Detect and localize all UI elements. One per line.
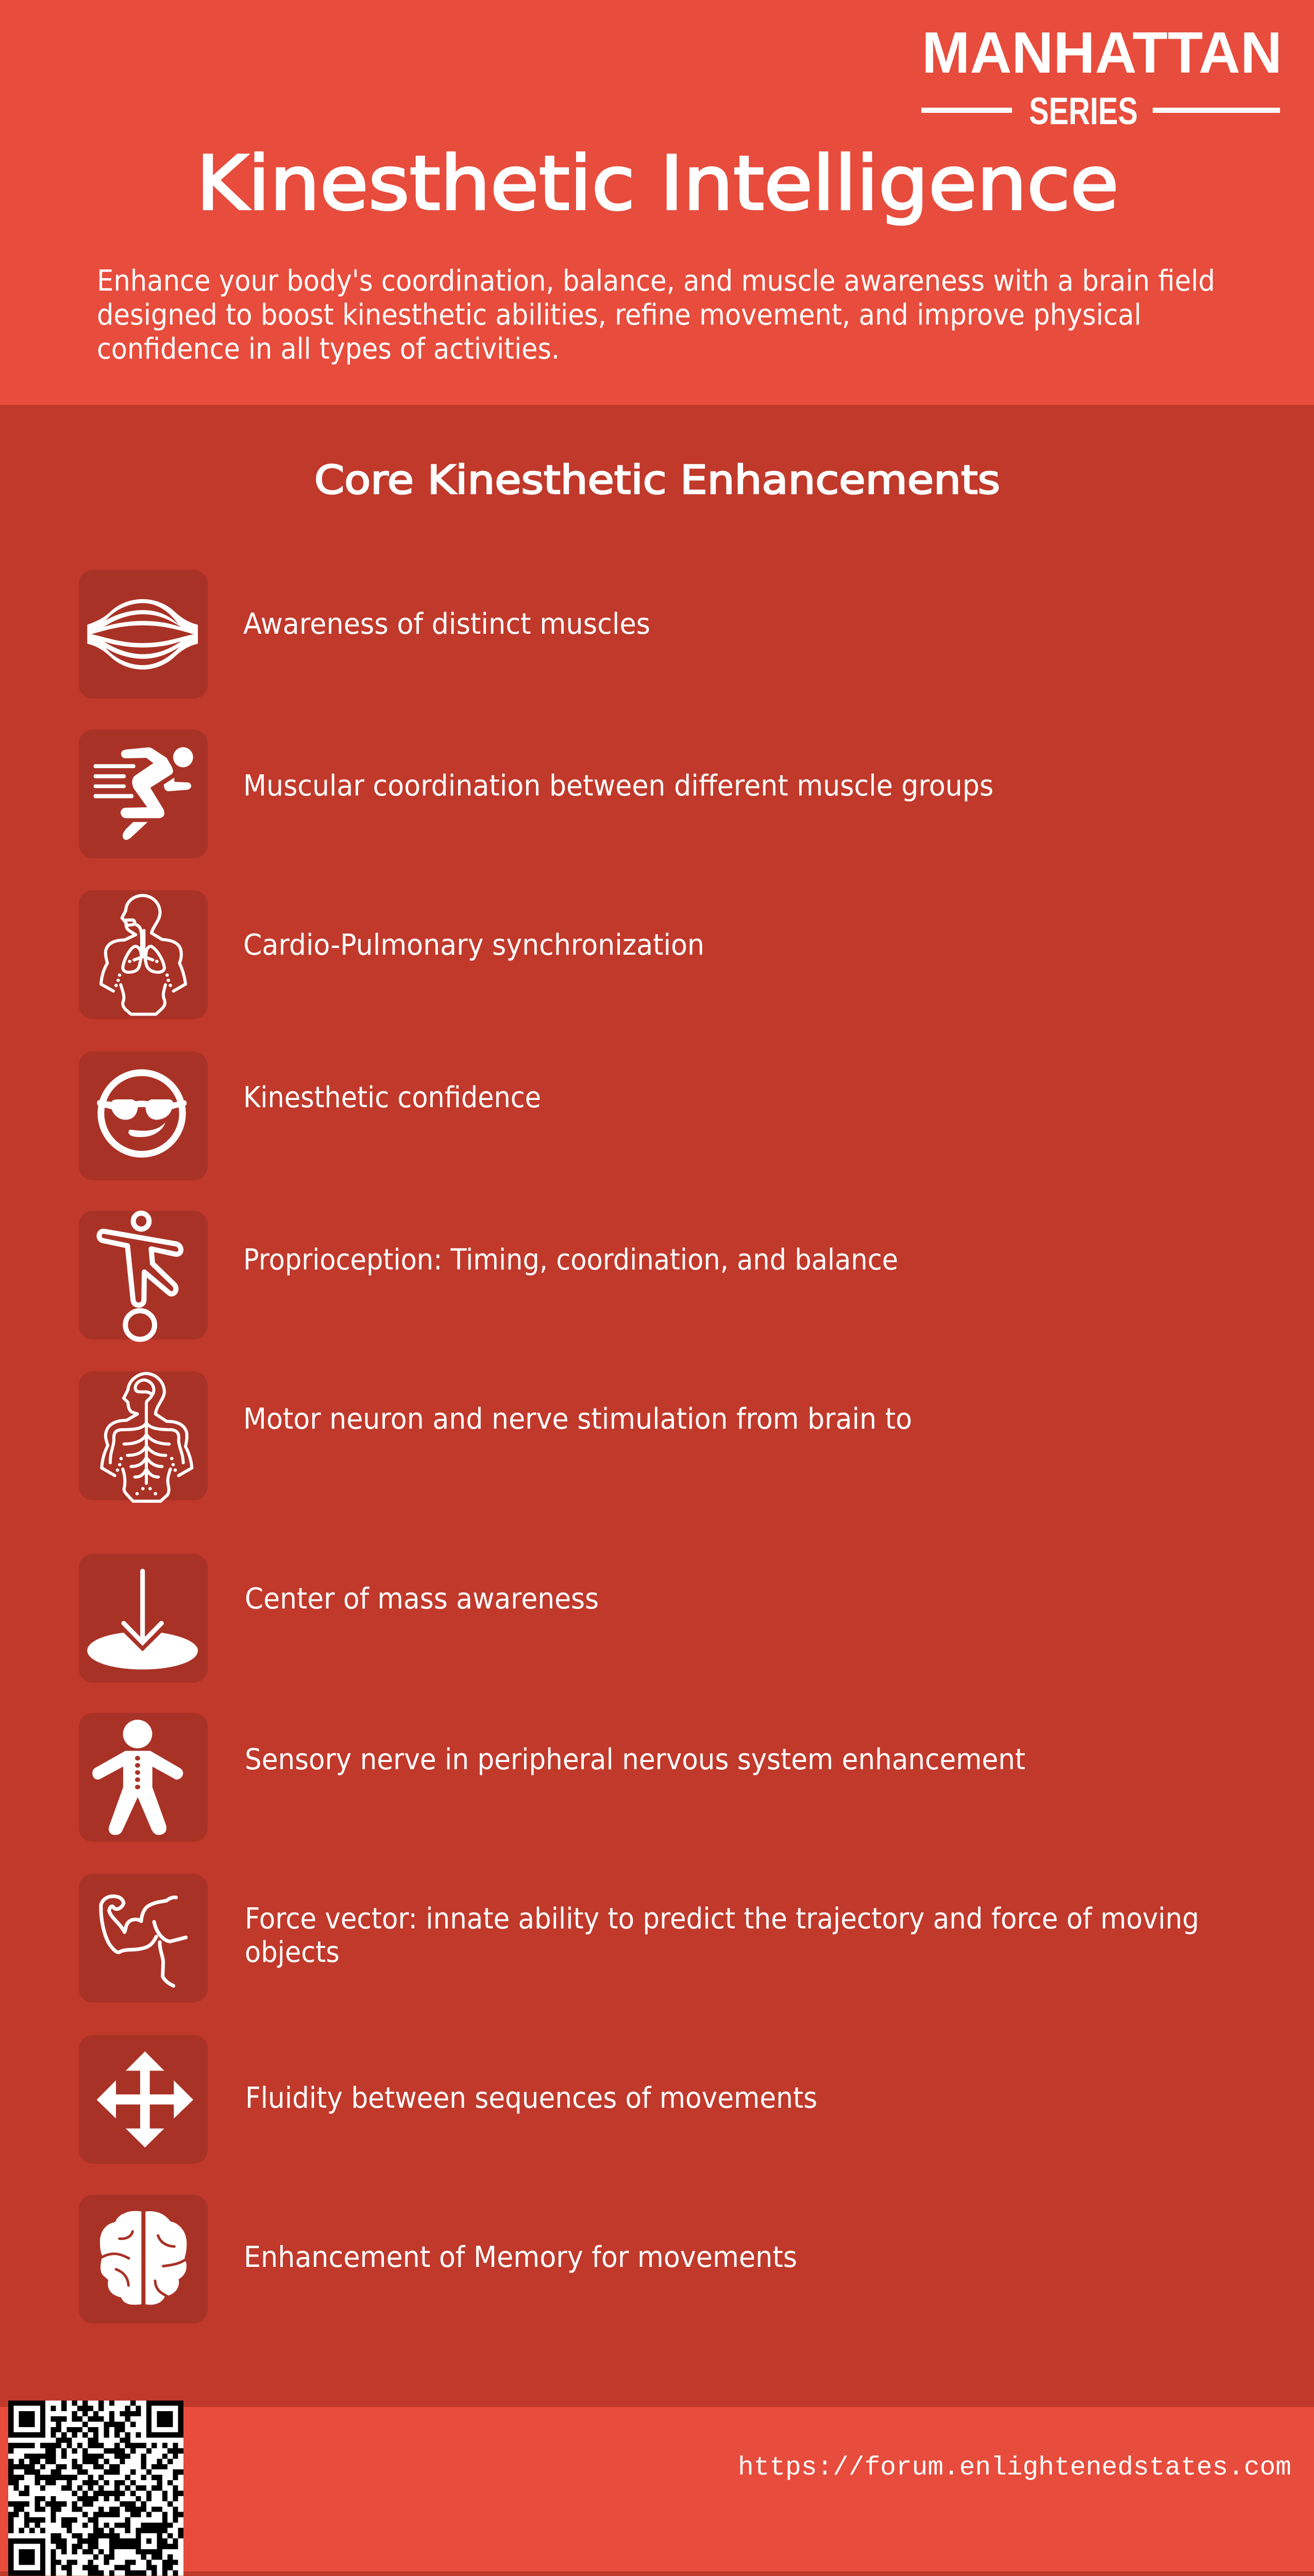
label: Proprioception: Timing, coordination, and balance (243, 1243, 898, 1277)
brand: Manhattan series: SERIES (1029, 90, 1138, 132)
label: Motor neuron and nerve stimulation from brain to (243, 1402, 912, 1436)
label: Center of mass awareness (245, 1582, 599, 1616)
label: Fluidity between sequences of movements (245, 2081, 817, 2115)
brand: Manhattan series: MANHATTAN (922, 20, 1282, 85)
item: fluidity (79, 2035, 817, 2164)
icon: nervous system torso (102, 1374, 192, 1501)
icon: sunglasses smiley (97, 1070, 187, 1158)
icon: runner (94, 747, 193, 840)
item: confidence (79, 1052, 541, 1180)
intro paragraph: designed to boost kinesthetic abilities, refine movement, and improve physical (97, 298, 1141, 332)
item: memory (79, 2195, 797, 2324)
item: coordination (79, 730, 993, 858)
title: Kinesthetic Intelligence (196, 140, 1119, 227)
intro paragraph: confidence in all types of activities. (97, 332, 560, 366)
icon: four-way arrows (97, 2052, 193, 2147)
QR code (8, 2400, 183, 2575)
item: center of mass (79, 1554, 599, 1683)
section heading: Core Kinesthetic Enhancements (314, 457, 1000, 503)
icon: flexing arm (101, 1896, 186, 1986)
label: Kinesthetic confidence (243, 1081, 541, 1114)
label: objects (245, 1936, 340, 1969)
item: muscles (79, 570, 650, 699)
label: Sensory nerve in peripheral nervous system enhancement (245, 1743, 1025, 1776)
brand: Manhattan series (921, 20, 1282, 132)
label: Enhancement of Memory for movements (244, 2241, 797, 2274)
icon: torso with lungs (101, 895, 186, 1014)
label: Cardio-Pulmonary synchronization (243, 928, 704, 962)
icon: muscle (87, 599, 198, 670)
panel: header (0, 0, 1314, 405)
icon: arrow onto disc (87, 1571, 198, 1669)
label (245, 1902, 1199, 1969)
label: Force vector: innate ability to predict the trajectory and force of moving (245, 1902, 1199, 1936)
item: sensory nerve (79, 1713, 1025, 1842)
label: Muscular coordination between different muscle groups (243, 769, 993, 803)
intro paragraph: Enhance your body's coordination, balance, and muscle awareness with a brain field (97, 264, 1215, 298)
icon: figure balancing on ball (99, 1213, 181, 1340)
label: Awareness of distinct muscles (243, 607, 650, 641)
item: proprioception (79, 1211, 898, 1340)
item: cardio-pulmonary (79, 890, 704, 1019)
panel: footer (0, 2407, 1314, 2571)
item: motor neuron (79, 1371, 912, 1501)
intro paragraph (97, 264, 1215, 366)
footer url: https://forum.enlightenedstates.com (738, 2453, 1291, 2483)
icon: brain (100, 2211, 187, 2305)
icon: person with nodes (92, 1720, 183, 1835)
item: force vector (79, 1874, 1199, 2003)
